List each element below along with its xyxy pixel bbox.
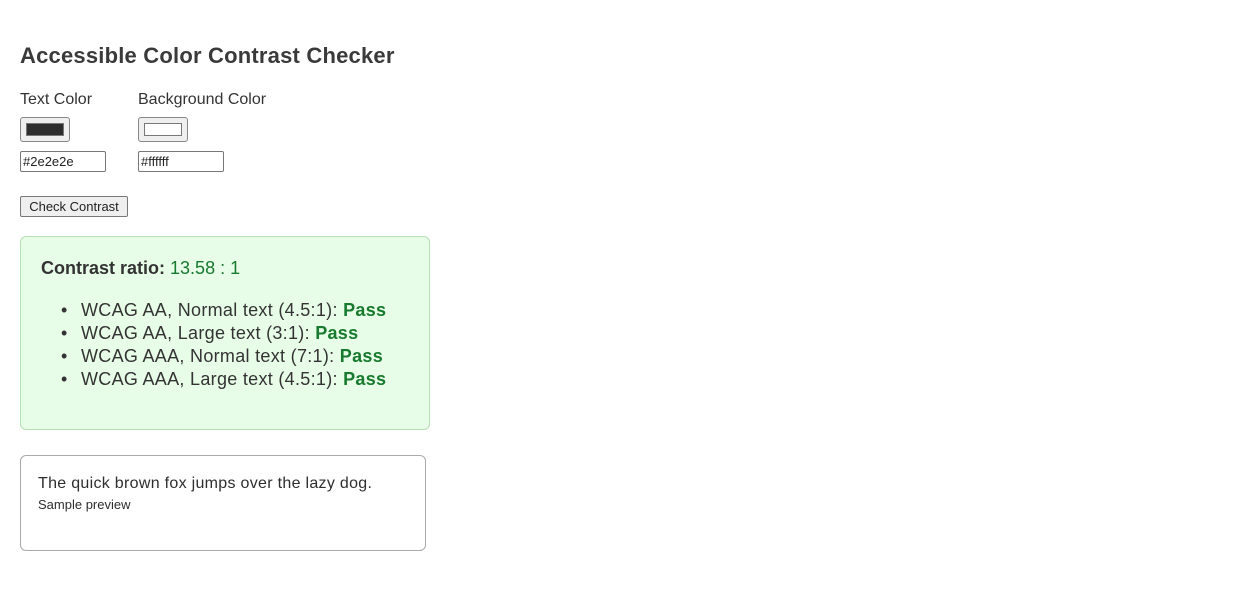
- panel: results: [20, 236, 430, 430]
- input: background hex: #ffffff: [141, 154, 169, 169]
- swatch: text color: [20, 117, 70, 142]
- list of WCAG results: [62, 300, 386, 389]
- list of WCAG results: WCAG AAA, Large text (4.5:1): Pass: [81, 369, 386, 389]
- button: check contrast: Check Contrast: [29, 199, 119, 214]
- title: Accessible Color Contrast Checker: [20, 43, 395, 68]
- list of WCAG results: WCAG AA, Normal text (4.5:1): Pass: [81, 300, 386, 320]
- label: background color: Background Color: [138, 91, 266, 108]
- input: text hex: [20, 151, 106, 172]
- list of WCAG results: WCAG AA, Large text (3:1): Pass: [81, 323, 358, 343]
- preview sentence: The quick brown fox jumps over the lazy dog.: [38, 475, 372, 492]
- button: check contrast: [20, 196, 128, 217]
- swatch: background color: [138, 117, 188, 142]
- contrast ratio: Contrast ratio: 13.58 : 1: [41, 258, 240, 278]
- input: background hex: [138, 151, 224, 172]
- list of WCAG results: WCAG AAA, Normal text (7:1): Pass: [81, 346, 383, 366]
- preview caption: Sample preview: [38, 497, 130, 512]
- label: text color: Text Color: [20, 91, 92, 108]
- input: text hex: #2e2e2e: [23, 154, 74, 169]
- panel: preview: [20, 455, 426, 551]
